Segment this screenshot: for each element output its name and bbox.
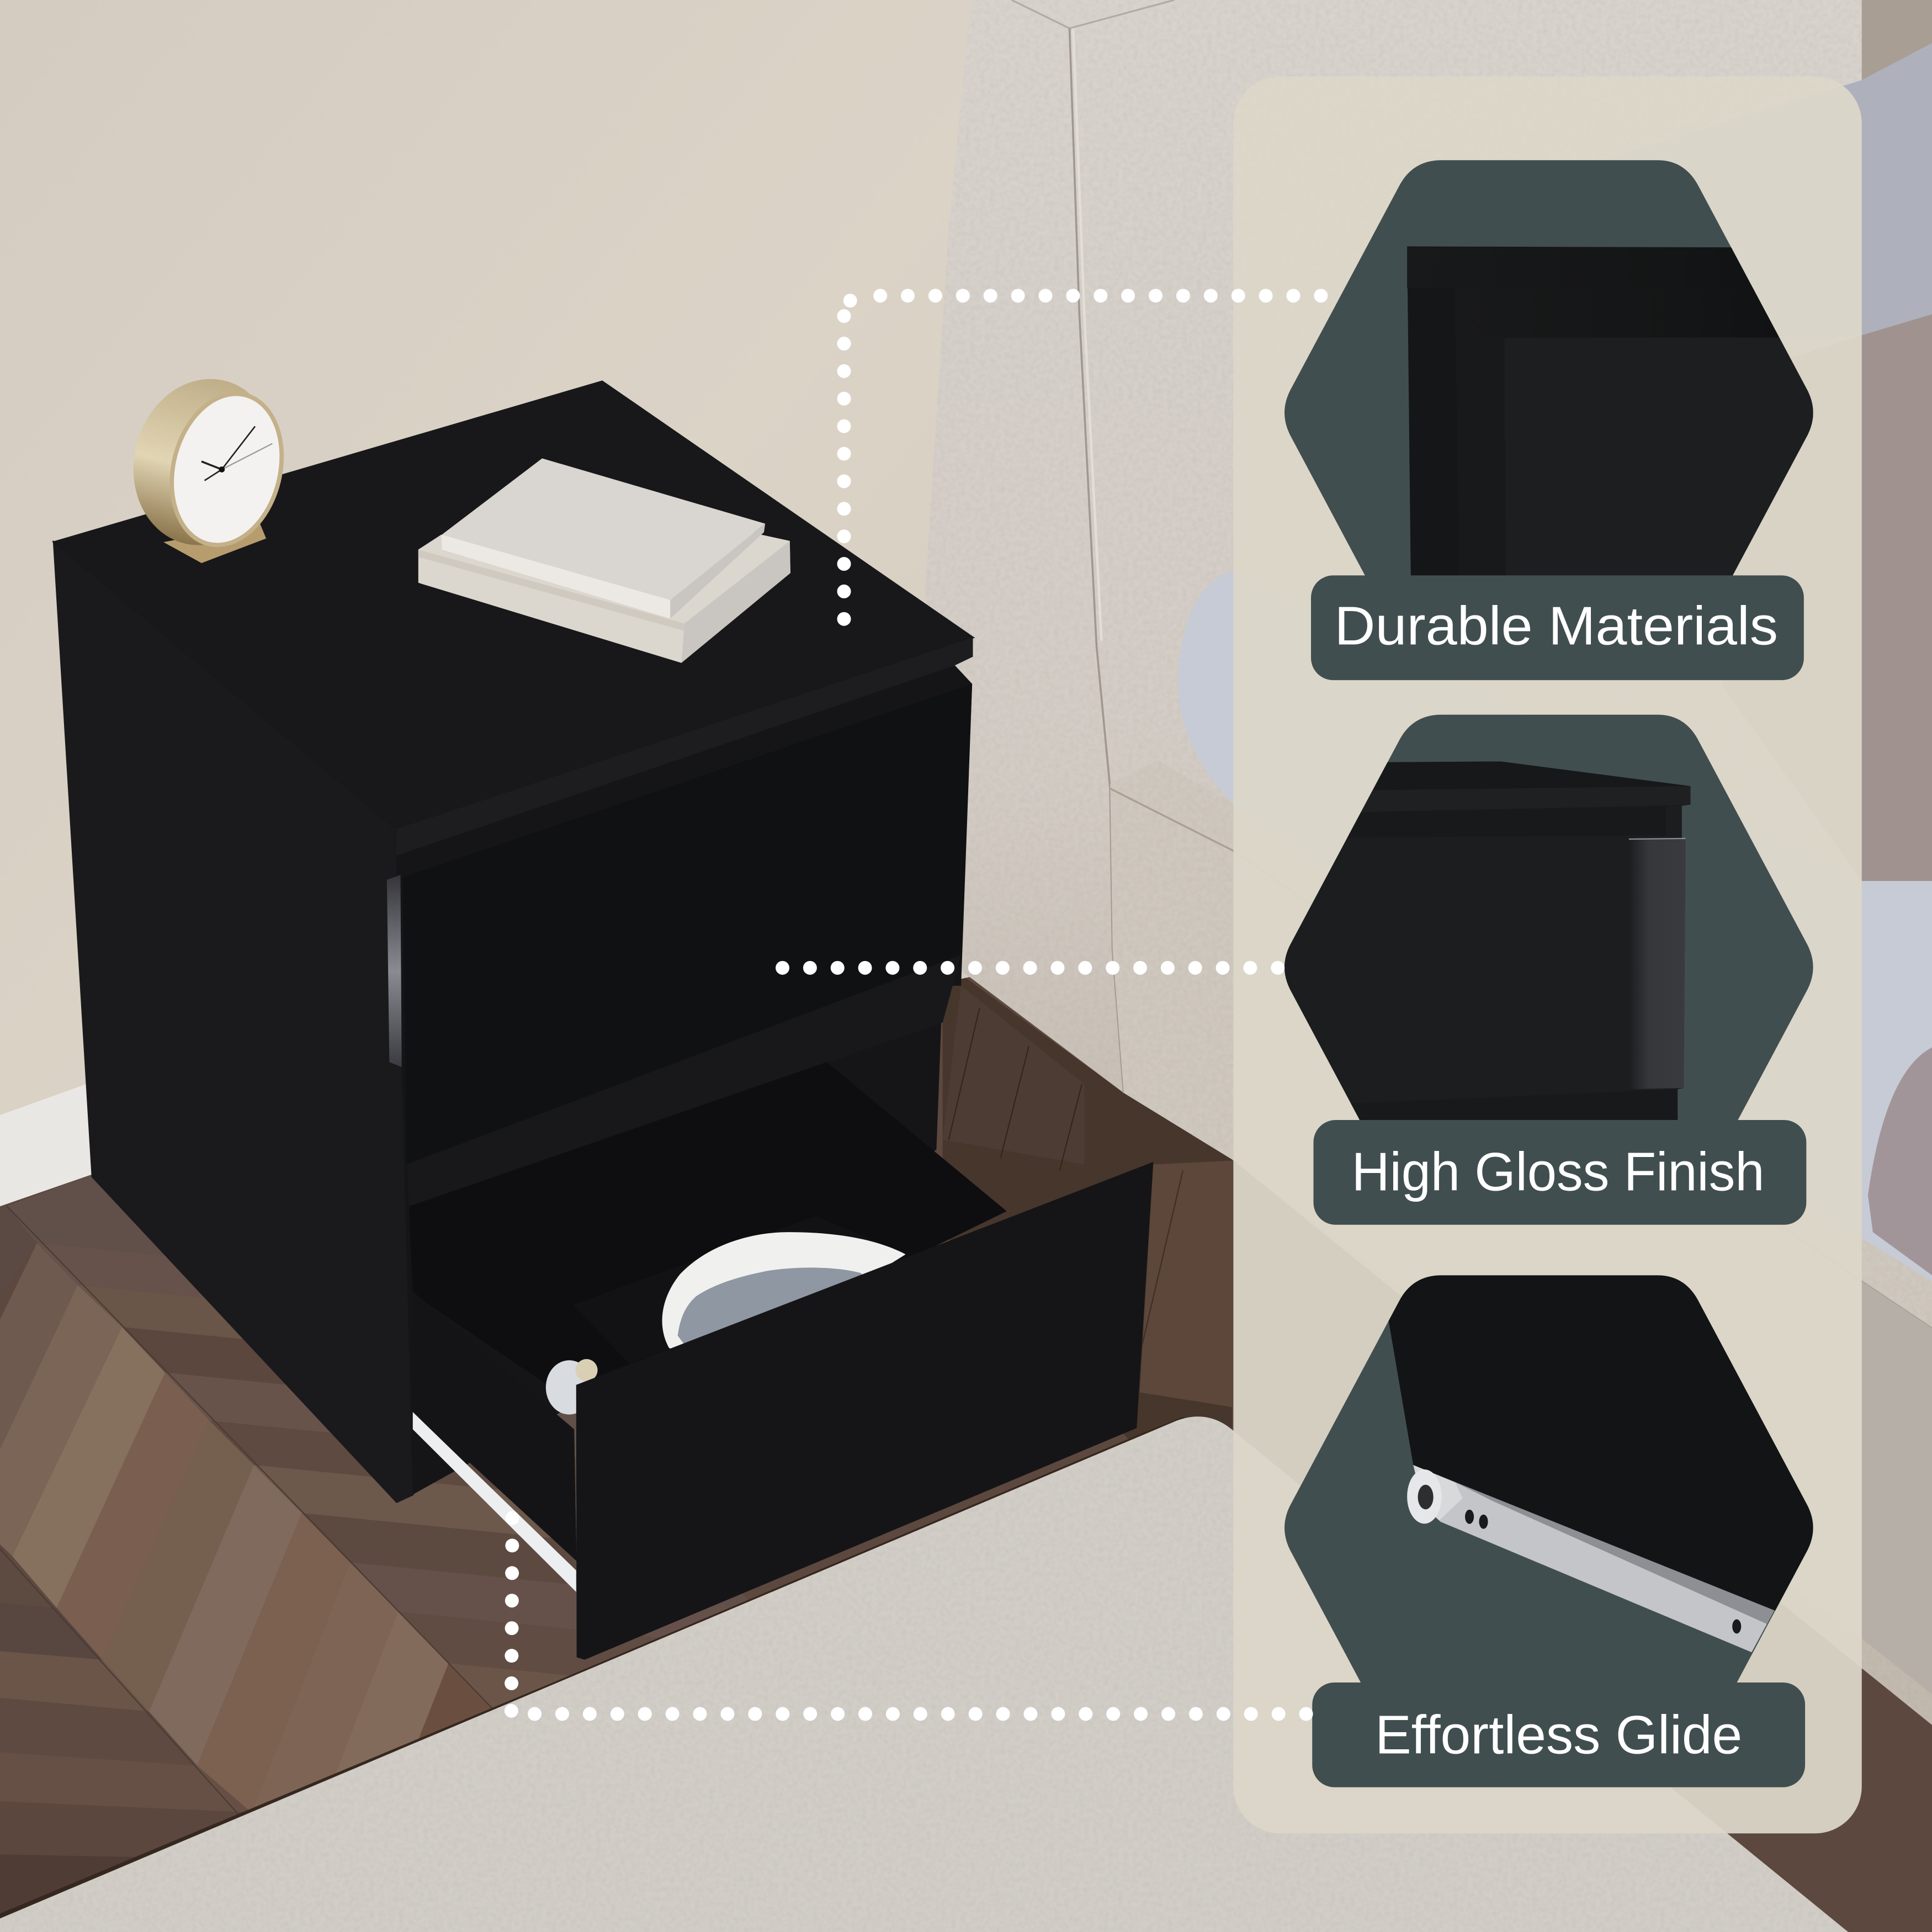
dotted connector: durable materials (844, 296, 1321, 620)
cabinet top (54, 381, 973, 829)
open drawer (409, 1062, 1153, 1660)
top drawer (403, 684, 972, 1164)
label: effortless glide (1312, 1682, 1805, 1787)
rug (0, 1416, 1848, 1932)
baseboard (0, 1082, 92, 1206)
front frame (396, 665, 972, 1495)
callout hexagon: high gloss finish (1285, 714, 1813, 1120)
small bowl cream (575, 1359, 598, 1381)
white slide (413, 1412, 576, 1592)
translucent panel (1233, 76, 1862, 1833)
cabinet close-up (1285, 762, 1690, 1120)
drawer underside (1389, 1275, 1813, 1611)
label: high gloss finish: High Gloss Finish (1352, 1141, 1764, 1202)
rug shadow edge (0, 1417, 1232, 1932)
small bowl (546, 1360, 593, 1414)
bedding: pillows and duvet (1178, 0, 1932, 1281)
metal glide rail (1407, 1465, 1774, 1652)
bed base (1110, 760, 1932, 1694)
layered board edges (1407, 246, 1848, 579)
cabinet (54, 381, 973, 1502)
dotted connector: effortless glide (511, 1517, 1306, 1714)
label: effortless glide: Effortless Glide (1375, 1704, 1742, 1765)
bed headboard (925, 0, 1932, 1725)
label: durable materials (1311, 575, 1804, 680)
inner box (573, 1216, 906, 1364)
top lip (396, 638, 973, 856)
drawer side (413, 1291, 577, 1561)
callout hexagon: durable materials (1285, 160, 1813, 575)
cabinet side (54, 542, 413, 1502)
dotted connector: high gloss finish (779, 965, 1278, 971)
bowl inner (678, 1267, 866, 1346)
clock (116, 364, 300, 563)
rail (407, 955, 961, 1208)
drawer front (576, 1162, 1153, 1660)
label: durable materials: Durable Materials (1334, 595, 1778, 656)
label: high gloss finish (1313, 1120, 1806, 1225)
wall background (0, 0, 986, 1206)
books (418, 458, 790, 663)
bowl (662, 1232, 906, 1350)
gloss highlight (387, 875, 402, 1067)
callout hexagon: effortless glide (1285, 1275, 1813, 1682)
wooden floor (0, 961, 1932, 1932)
drawer interior (409, 1062, 1007, 1405)
